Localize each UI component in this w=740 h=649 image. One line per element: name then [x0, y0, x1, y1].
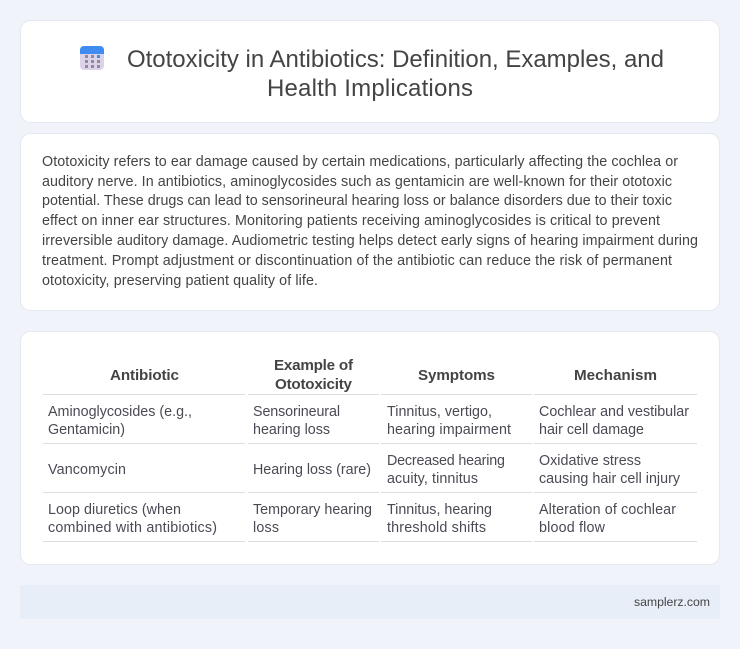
table row: aminoglycosides	[48, 404, 689, 438]
icon: calendar	[80, 46, 104, 70]
table row: vancomycin: Hearing loss (rare)	[253, 462, 371, 478]
table row: aminoglycosides: Cochlear and vestibular	[539, 404, 689, 420]
table header: Antibiotic	[110, 367, 179, 384]
table row: loop diuretics: Loop diuretics (when	[48, 502, 181, 518]
table header: Symptoms	[418, 367, 495, 384]
title	[127, 46, 664, 102]
table row: vancomycin: Vancomycin	[48, 462, 126, 478]
title: Health Implications	[267, 75, 473, 102]
table row: loop diuretics: Temporary hearing	[253, 502, 372, 518]
text block: definition: potential. These drugs can lead to sensorineural hearing loss or balance disorders due to their toxic	[42, 193, 672, 209]
table row: vancomycin	[48, 453, 681, 487]
table row: loop diuretics: combined with antibiotics)	[48, 520, 217, 536]
table row: vancomycin: acuity, tinnitus	[387, 471, 478, 487]
panel: antibiotics table	[20, 332, 720, 564]
text block: definition	[42, 154, 698, 289]
table row: vancomycin: Decreased hearing	[387, 453, 505, 469]
panel: definition paragraph	[20, 134, 720, 310]
table header: Ototoxicity	[275, 376, 353, 393]
text block: definition: ototoxicity, preserving patient quality of life.	[42, 273, 318, 289]
title: Ototoxicity in Antibiotics: Definition, Examples, and	[127, 46, 664, 73]
table row: loop diuretics	[48, 502, 676, 536]
text block: definition: Ototoxicity refers to ear damage caused by certain medications, particularly affecting the cochlea or	[42, 154, 678, 170]
table row: aminoglycosides: Tinnitus, vertigo,	[387, 404, 492, 420]
panel: title card	[20, 20, 720, 122]
table row: aminoglycosides: hair cell damage	[539, 422, 644, 438]
text block: definition: irreversible auditory damage. Audiometric testing helps detect early signs of hearing impairment during	[42, 233, 698, 249]
table header	[110, 357, 657, 393]
footer text: samplerz.com	[634, 595, 710, 609]
table row: aminoglycosides: Sensorineural	[253, 404, 340, 420]
table row: aminoglycosides: hearing loss	[253, 422, 330, 438]
table row: loop diuretics: Alteration of cochlear	[539, 502, 676, 518]
footer bar	[20, 585, 720, 619]
table row: loop diuretics: threshold shifts	[387, 520, 486, 536]
table row: loop diuretics: Tinnitus, hearing	[387, 502, 492, 518]
table row: aminoglycosides: hearing impairment	[387, 422, 511, 438]
table rules	[43, 394, 697, 542]
text block: definition: treatment. Prompt adjustment or discontinuation of the antibiotic can reduce the risk of permanent	[42, 253, 672, 269]
table header: Example of	[274, 357, 354, 374]
table row: vancomycin: Oxidative stress	[539, 453, 641, 469]
table row: aminoglycosides: Gentamicin)	[48, 422, 125, 438]
table row: loop diuretics: blood flow	[539, 520, 606, 536]
table row: loop diuretics: loss	[253, 520, 279, 536]
table header: Mechanism	[574, 367, 657, 384]
table row: vancomycin: causing hair cell injury	[539, 471, 681, 487]
text block: definition: effect on inner ear structures. Monitoring patients receiving aminoglycosides is critical to prevent	[42, 213, 660, 229]
table row: aminoglycosides: Aminoglycosides (e.g.,	[48, 404, 192, 420]
text block: definition: auditory nerve. In antibiotics, aminoglycosides such as gentamicin are well-known for their ototoxic	[42, 174, 672, 190]
